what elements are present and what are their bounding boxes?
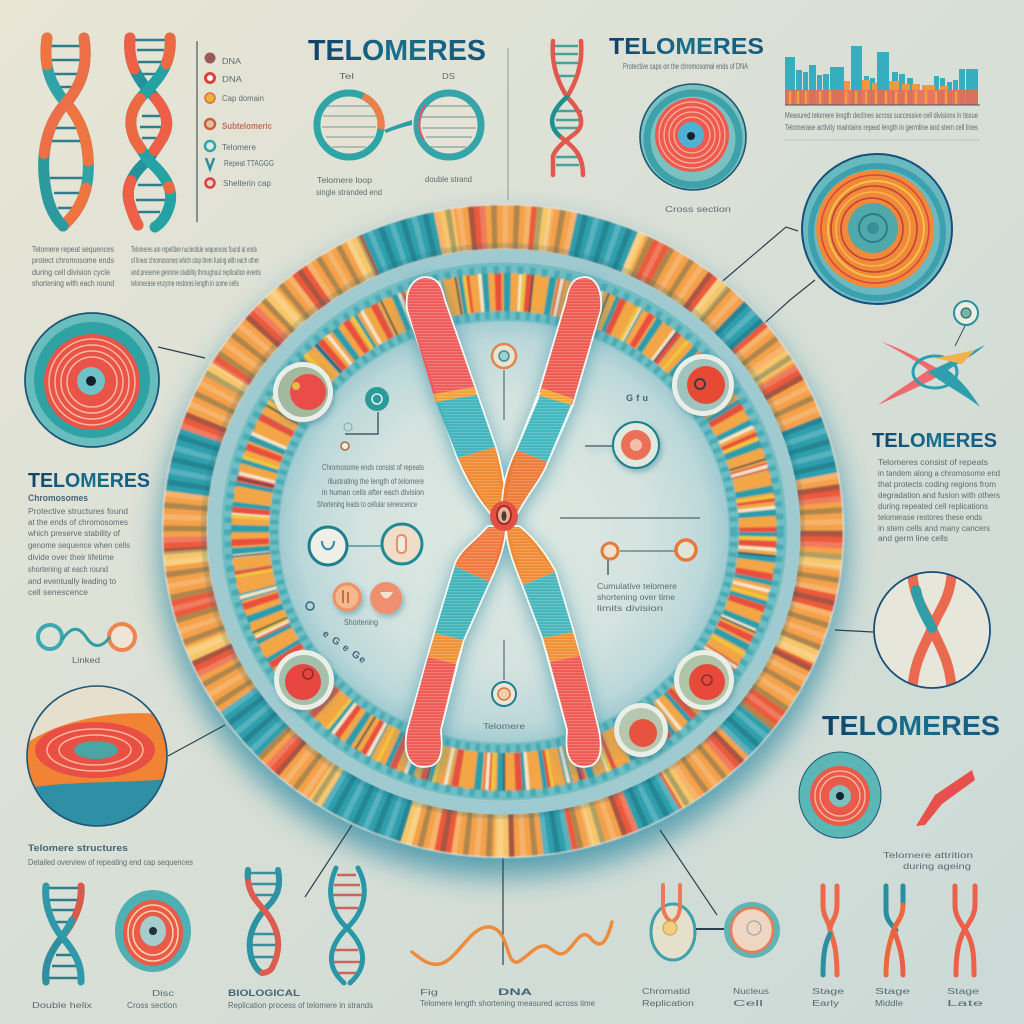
text block: left: Chromosomes — [28, 493, 88, 503]
text block: left: divide over their lifetime — [28, 553, 115, 562]
caption: lower right: during ageing — [903, 862, 971, 871]
icon: left ring — [317, 93, 381, 157]
scattered labels inner left — [306, 602, 378, 666]
legend item 7: Shelterin cap — [223, 179, 272, 188]
outer telomere ring — [185, 227, 821, 835]
marker small — [341, 423, 352, 450]
text block inner left: in human cells after each division — [322, 488, 424, 497]
icon: chromatid 2 — [886, 886, 903, 975]
chart caption — [785, 111, 980, 140]
text block: left: and eventually leading to — [28, 577, 117, 586]
text block: left: Protective structures found — [28, 507, 128, 516]
icon: chromatid 1 — [823, 886, 837, 975]
centre pointer bottom — [492, 640, 516, 706]
marker pair — [602, 540, 696, 575]
legend item 3 — [205, 93, 264, 103]
captions: Replication process of telomere in strands — [228, 1001, 373, 1010]
title: telomeres top centre: TELOMERES — [308, 35, 486, 67]
arm: upper left — [408, 278, 505, 513]
icon: bottom DNA 2 — [248, 870, 280, 973]
title: telomeres lower right: TELOMERES — [822, 710, 1000, 741]
chromosome X — [407, 278, 600, 766]
chart: orange wave — [412, 922, 612, 964]
title: telomeres left: TELOMERES — [28, 470, 150, 492]
icon: bottom DNA 1 — [46, 886, 82, 982]
captions: BIOLOGICAL — [228, 988, 301, 998]
arm: lower right — [507, 527, 600, 766]
icon: chromatid 3 — [955, 886, 975, 975]
caption: single stranded end — [316, 188, 382, 197]
text block: right — [878, 458, 1000, 543]
icon: small top right marker — [954, 301, 978, 346]
divider line — [507, 48, 509, 200]
text block inner right: shortening over time — [597, 593, 676, 602]
text block: left: genome sequence when cells — [28, 541, 130, 550]
text block: right: in tandem along a chromosome end — [878, 469, 1000, 478]
panel: linked circles diagram: DS — [442, 72, 455, 81]
icon: colorful ribbon — [878, 342, 985, 407]
title: telomeres upper right: TELOMERES — [609, 33, 764, 59]
icon: lower right disc — [799, 752, 881, 838]
captions: Cross section — [127, 1001, 177, 1010]
captions: Early — [812, 999, 839, 1008]
text block: top left captions — [32, 245, 261, 288]
inner right annotations: Gfu — [626, 393, 648, 403]
caption: lower right — [883, 851, 973, 871]
legend item 4 — [205, 119, 272, 131]
inner telomere ring — [228, 270, 780, 794]
legend item 1: DNA — [222, 57, 242, 66]
caption: bottom left: Telomere structures — [28, 843, 128, 853]
orange circles inner left — [334, 582, 402, 614]
legend item 4: Subtelomeric — [222, 121, 272, 131]
caption bottom centre: Telomere — [483, 722, 526, 731]
scattered labels inner left: Shortening — [344, 618, 378, 627]
icon: bottom disc — [115, 890, 191, 972]
text block: right: during repeated cell replications — [878, 502, 988, 511]
captions: DNA — [498, 987, 533, 997]
icon: bottom small disc — [724, 902, 780, 958]
long line — [560, 517, 700, 519]
centre pointer top — [492, 344, 516, 420]
panel: bottom row — [32, 868, 984, 1010]
marker: cell circle — [585, 422, 659, 468]
connector — [384, 120, 412, 133]
legend: top left key — [197, 41, 274, 222]
text block: left — [27, 493, 130, 597]
knob lower left — [274, 650, 334, 710]
text block: top left captions: Telomeres are repetitive nucleotide sequences found at ends — [131, 245, 257, 254]
icon: bottom DNA 3 — [331, 868, 364, 983]
captions: Stage — [812, 987, 845, 996]
icon: DNA helix 1 — [44, 38, 88, 226]
caption: lower right: Telomere attrition — [883, 851, 973, 860]
text block: right: Telomeres consist of repeats — [878, 458, 988, 467]
knob lower right — [674, 650, 734, 710]
text block inner left — [317, 463, 424, 509]
legend item 3: Cap domain — [222, 94, 264, 103]
caption: disc: Cross section — [665, 205, 731, 214]
text block: top left captions: Telomere repeat sequences — [32, 245, 114, 254]
centromere — [490, 501, 518, 531]
captions: Stage — [875, 987, 911, 996]
icon: red marker — [916, 770, 975, 826]
legend item 5 — [205, 141, 257, 152]
text block inner right: Cumulative telomere — [597, 582, 678, 591]
icon: DNA helix 2 — [128, 38, 171, 227]
inner left annotations — [306, 387, 424, 666]
scattered labels inner left: e G e Ge — [320, 628, 368, 666]
arm: lower left — [407, 527, 505, 766]
text block inner right — [597, 582, 678, 613]
knob bottom — [614, 703, 668, 757]
icon: left disc — [25, 313, 159, 447]
captions: Fig — [420, 988, 438, 997]
text block: left: cell senescence — [28, 588, 89, 597]
interior background — [274, 315, 734, 749]
caption: bottom left — [28, 843, 193, 867]
text block: top left captions: protect chromosome ends — [32, 256, 114, 265]
text block inner left: illustrating the length of telomere — [328, 477, 424, 486]
panel: linked circles diagram — [316, 72, 481, 197]
icon: thin DNA helix — [552, 41, 583, 175]
caption under title: Protective caps on the chromosomal ends of DNA — [623, 62, 748, 71]
shadow of rings — [185, 244, 821, 852]
text block: left: at the ends of chromosomes — [28, 518, 128, 527]
title: telomeres right: TELOMERES — [872, 430, 997, 452]
text block: right: degradation and fusion with others — [878, 491, 1000, 500]
captions: Stage — [947, 987, 980, 996]
panel: top left DNA helices — [44, 38, 171, 227]
icon: right ring — [417, 93, 481, 157]
caption — [316, 175, 472, 197]
marker teal — [345, 387, 389, 434]
captions: Double helix — [32, 1001, 92, 1010]
captions — [32, 987, 984, 1010]
arm: upper right — [503, 278, 600, 513]
legend item 5: Telomere — [222, 143, 257, 152]
linked circles inner left — [309, 524, 422, 565]
text block inner right: limits division — [597, 604, 663, 613]
captions: Late — [947, 999, 984, 1008]
icon: top cross section disc — [640, 84, 746, 190]
bar chart — [785, 46, 980, 105]
legend item 6: Repeat TTAGGG — [224, 159, 274, 168]
text block: right: in stem cells and many cancers — [878, 524, 990, 533]
gap between rings — [214, 256, 794, 808]
text block: left: which preserve stability of — [27, 529, 121, 538]
text block: left: shortening at each round — [28, 565, 108, 574]
texture — [407, 278, 600, 766]
knob upper right — [672, 354, 734, 416]
inner right annotations — [560, 393, 700, 613]
text block: top left captions: and preserve genome stability throughout replication events — [131, 268, 261, 277]
text block: top left captions: shortening with each round — [32, 279, 114, 288]
text block inner left: Chromosome ends consist of repeats — [322, 463, 424, 472]
caption: double strand — [425, 175, 472, 184]
leader lines — [158, 227, 873, 965]
icon: small linked circles — [38, 624, 135, 665]
icon: bottom left cross section — [20, 686, 175, 830]
text block: top left captions: during cell division cycle — [32, 268, 110, 277]
text block: top left captions: telomerase enzyme restores length in some cells — [131, 279, 239, 288]
caption: Telomere loop — [317, 176, 373, 185]
text block: right: that protects coding regions from — [878, 480, 996, 489]
legend item 7 — [206, 178, 272, 188]
icon: Y chromatid with bubble — [651, 885, 724, 960]
knob upper left — [273, 362, 333, 422]
captions: Cell — [733, 999, 763, 1008]
captions: Telomere length shortening measured across time — [420, 999, 596, 1008]
text block: top left captions: of linear chromosomes which stop them fusing with each other — [131, 256, 259, 265]
captions: Chromatid — [642, 987, 690, 996]
icon: big cross section disc — [802, 154, 952, 304]
captions: Disc — [152, 989, 174, 998]
captions: Replication — [642, 999, 694, 1008]
text block: right: telomerase restores these ends — [878, 513, 982, 522]
captions: Middle — [875, 999, 904, 1008]
panel: linked circles diagram: Tel — [339, 72, 354, 81]
text block: right: and germ line cells — [878, 534, 948, 543]
legend item 2 — [206, 74, 243, 84]
legend item 1 — [204, 52, 242, 66]
captions: Nucleus — [733, 987, 769, 996]
knobs on inner ring — [273, 354, 734, 757]
icon: small linked circles: Linked — [72, 656, 100, 665]
icon: right circle with chromatids — [873, 571, 991, 689]
legend item 6 — [206, 158, 274, 169]
legend item 2: DNA — [222, 75, 243, 84]
caption: bottom left: Detailed overview of repeating end cap sequences — [28, 858, 193, 867]
text block inner left: Shortening leads to cellular senescence — [317, 500, 417, 509]
